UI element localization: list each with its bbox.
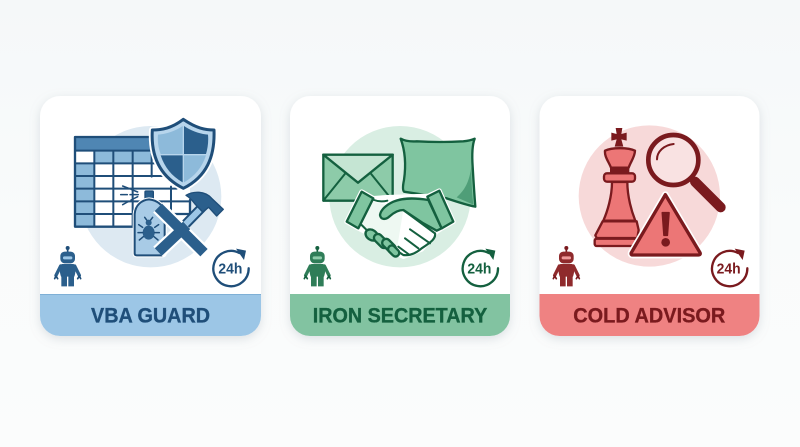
infographic [36,95,763,341]
icon: robot [55,246,81,286]
icon: warning triangle [631,195,700,255]
icon: bug spray can [135,191,165,255]
icon: 24h clock: 24h [717,260,741,277]
label band: Cold Advisor [540,294,760,336]
icon: cross wrench [158,207,204,253]
icon: shield [152,119,214,188]
heading: Cold Advisor: COLD ADVISOR [573,302,726,327]
icon: handshake [347,191,453,258]
icon group: envelope, pillow and handshake [304,126,498,286]
icon: envelope [323,155,393,201]
icon: robot [553,246,579,286]
heading: Iron Secretary: IRON SECRETARY [313,302,488,327]
icon: 24h clock: 24h [218,260,242,277]
icon: pillow [401,139,475,207]
label band: VBA Guard [40,294,261,336]
icon: hammer [177,192,223,233]
label band: Iron Secretary [290,294,510,336]
icon group: king, magnifier and warning [553,125,747,286]
icon: spreadsheet [75,137,190,227]
icon: 24h clock [712,249,747,286]
panel: Cold Advisor [540,96,760,336]
icon: robot [304,246,330,286]
icon: 24h clock: 24h [467,260,491,277]
icon: chess king [595,128,639,246]
icon: spray lines [121,186,138,205]
icon: 24h clock [463,249,498,286]
heading: VBA Guard: VBA GUARD [91,302,210,327]
icon group: spreadsheet, shield, spray and tools [55,119,249,286]
icon: 24h clock [213,249,249,286]
panel: VBA Guard [40,96,261,336]
panel: Iron Secretary [290,96,510,336]
icon: magnifier [648,135,721,207]
